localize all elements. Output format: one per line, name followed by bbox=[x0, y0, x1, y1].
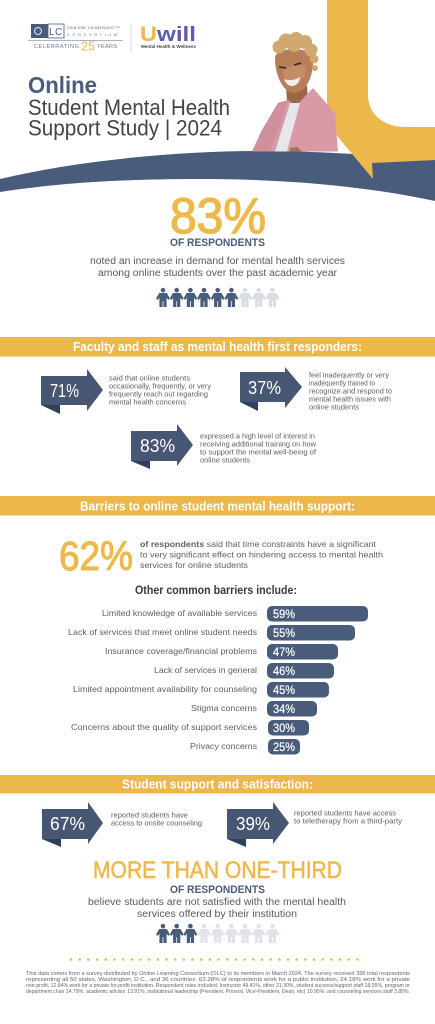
text: 67% description bbox=[111, 810, 202, 828]
text: 67% description: reported students have bbox=[111, 810, 188, 820]
bar: privacy 25%: 25% bbox=[273, 740, 295, 754]
arrow stat: 37% bbox=[240, 367, 302, 411]
white tee bbox=[275, 103, 300, 152]
title: Student Mental Health bbox=[28, 95, 230, 120]
bar: lack of services in general 46% bbox=[154, 663, 334, 678]
arrow stat: 39% bbox=[227, 802, 289, 847]
text: 71% description: said that online students bbox=[109, 374, 190, 382]
text: 37% description: feel inadequently or very bbox=[309, 370, 389, 380]
footnote bbox=[26, 971, 410, 995]
bar: lack of services 55%: Lack of services that meet online student needs bbox=[68, 627, 257, 637]
text: 83% description bbox=[200, 432, 317, 464]
text: 62% description bbox=[140, 540, 383, 570]
section band: barriers: Barriers to online student mental health support: bbox=[80, 498, 355, 514]
yellow speech-bubble U shape bbox=[327, 0, 435, 179]
text: 71% description: frequently reach out regarding bbox=[109, 390, 208, 398]
text: 37% description: inadequently trained to bbox=[309, 378, 375, 388]
bar: limited knowledge 59%: Limited knowledge of available services bbox=[102, 608, 257, 618]
arrow stat: 67% bbox=[42, 802, 103, 847]
logo: OLC celebrating 25 years: CONSORTIUM bbox=[67, 32, 117, 37]
logo: Uwill: U bbox=[140, 22, 157, 46]
section band: barriers bbox=[0, 496, 435, 516]
footnote: This data comes from a survey distributed by Online Learning Consortium (OLC) to its members in March 2024. The survey received 336 total respondents bbox=[26, 971, 410, 977]
stat: 83% of respondents: noted an increase in demand for mental health services bbox=[90, 256, 345, 267]
arrow stat: 71%: 71% bbox=[50, 381, 79, 401]
subheading: other barriers: Other common barriers include: bbox=[135, 585, 297, 597]
bar: quality concerns 30% bbox=[71, 720, 309, 736]
smile bbox=[284, 77, 300, 86]
bar: lack of services in general 46%: Lack of services in general bbox=[154, 665, 257, 675]
icon row: 6 of 9 people bbox=[156, 288, 279, 307]
bar: quality concerns 30%: Concerns about the quality of support services bbox=[71, 722, 257, 732]
bar: lack of services 55%: 55% bbox=[273, 626, 295, 640]
section band: faculty and staff bbox=[0, 337, 435, 356]
text: 71% description: occasionally, frequently, or very bbox=[109, 382, 211, 390]
logo: OLC celebrating 25 years: YEARS bbox=[97, 44, 117, 50]
footnote: department chair 14.79%, academic advisor 13.91%, institutional leadership (President, Provost, Vice-President, Dean, etc) 10.95%, and counseling services staff 3.85%. bbox=[26, 989, 410, 995]
bar: limited knowledge 59% bbox=[102, 606, 368, 622]
bar: insurance 47%: 47% bbox=[273, 645, 295, 659]
stat: more than one-third: believe students are not satisfied with the mental health bbox=[88, 897, 346, 908]
footnote: representing all 50 states, Washington, D.C., and 36 countries. 63.28% of respondents work for a public institution, 24.18% work for a private bbox=[26, 977, 410, 983]
logo: OLC celebrating 25 years bbox=[28, 24, 123, 54]
bar: stigma 34%: 34% bbox=[273, 702, 295, 716]
text: 39% description: to teletherapy from a third-party bbox=[294, 816, 402, 826]
text: 67% description: access to onsite counseling bbox=[111, 818, 202, 828]
eyes bbox=[279, 63, 301, 68]
text: 83% description: online students bbox=[200, 456, 250, 464]
dotted separator bbox=[71, 958, 366, 961]
text: 71% description: mental health concerns bbox=[109, 398, 186, 406]
logo divider bbox=[130, 24, 132, 52]
stat: more than one-third: MORE THAN ONE-THIRD bbox=[93, 857, 342, 884]
text: 37% description: online students bbox=[309, 402, 359, 412]
text: 83% description: receiving additional training on how bbox=[200, 440, 317, 448]
logo: OLC celebrating 25 years: ONLINE LEARNING™ bbox=[67, 25, 120, 30]
bar chart: common barriers bbox=[68, 606, 368, 754]
bar: insurance 47% bbox=[105, 644, 338, 660]
logo: Uwill bbox=[140, 22, 196, 49]
text: 62% description: of respondents said that time constraints have a significant bbox=[140, 540, 377, 549]
section band: student support: Student support and satisfaction: bbox=[122, 776, 313, 792]
logo: OLC celebrating 25 years: L bbox=[49, 27, 55, 38]
bar: limited knowledge 59%: 59% bbox=[273, 607, 295, 621]
text: 37% description: recognize and respond to bbox=[309, 386, 392, 396]
footnote: non-profit, 12.84% work for a private for-profit institution. Respondent roles included: Instructor 49.41%, other 21.30%, student success/support staff 18.05%, program or bbox=[26, 983, 410, 989]
stat: 83% of respondents bbox=[90, 188, 345, 279]
arrow stat: 39%: 39% bbox=[236, 814, 270, 834]
bar: stigma 34%: Stigma concerns bbox=[191, 703, 257, 713]
stat: 83% of respondents: among online students over the past academic year bbox=[98, 268, 338, 279]
arrow stat: 71% bbox=[41, 369, 103, 414]
crossed hand bbox=[290, 147, 302, 152]
bar: lack of services 55% bbox=[68, 625, 355, 640]
logo: OLC celebrating 25 years: 25 bbox=[81, 38, 95, 54]
face bbox=[275, 49, 313, 93]
bar: lack of services in general 46%: 46% bbox=[273, 664, 295, 678]
curly hair bbox=[272, 32, 318, 71]
arrow stat: 67%: 67% bbox=[50, 814, 85, 834]
text: 62% description: to very significant effect on hindering access to mental health bbox=[140, 550, 383, 560]
photo: smiling student bbox=[252, 32, 338, 152]
bar: appointment availability 45%: 45% bbox=[273, 683, 295, 697]
logo: OLC celebrating 25 years: C bbox=[55, 27, 62, 38]
text: 39% description: reported students have access bbox=[294, 808, 396, 818]
text: 71% description bbox=[109, 374, 211, 406]
arrow stat: 83%: 83% bbox=[140, 436, 175, 456]
logo: OLC celebrating 25 years: CELEBRATING bbox=[34, 44, 79, 50]
title: Support Study | 2024 bbox=[28, 116, 222, 140]
bar: stigma 34% bbox=[191, 701, 317, 716]
icon row: 3 of 9 people bbox=[156, 924, 279, 943]
stat: 83% of respondents: OF RESPONDENTS bbox=[170, 237, 265, 249]
arrow stat: 37%: 37% bbox=[248, 378, 281, 398]
bar: appointment availability 45%: Limited appointment availability for counseling bbox=[73, 684, 257, 694]
stat: more than one-third bbox=[88, 857, 346, 920]
bar: quality concerns 30%: 30% bbox=[273, 721, 295, 735]
logo: Uwill: will bbox=[156, 24, 196, 46]
bar: privacy 25%: Privacy concerns bbox=[190, 741, 257, 751]
text: 37% description bbox=[309, 370, 392, 412]
stat: more than one-third: OF RESPONDENTS bbox=[170, 884, 265, 896]
neck bbox=[286, 86, 308, 108]
bar: appointment availability 45% bbox=[73, 682, 329, 698]
text: 39% description bbox=[294, 808, 402, 826]
title bbox=[28, 72, 230, 140]
bar: privacy 25% bbox=[190, 739, 300, 754]
text: 37% description: mental health issues with bbox=[309, 394, 391, 404]
arrow stat: 83% bbox=[131, 424, 193, 469]
text: 62% description: services for online students bbox=[140, 561, 248, 570]
bar: insurance 47%: Insurance coverage/financial problems bbox=[105, 646, 257, 656]
section band: faculty and staff: Faculty and staff as mental health first responders: bbox=[73, 339, 362, 354]
title: Online bbox=[28, 72, 97, 98]
stat: 83% of respondents: 83% bbox=[170, 188, 266, 244]
pink shirt bbox=[252, 88, 338, 152]
text: 83% description: to support the mental well-being of bbox=[200, 448, 317, 456]
stat: more than one-third: services offered by their institution bbox=[137, 909, 297, 920]
section band: student support bbox=[0, 775, 435, 794]
header wave band bbox=[0, 151, 435, 201]
stat: 62%: 62% bbox=[59, 533, 133, 579]
text: 83% description: expressed a high level of interest in bbox=[200, 432, 315, 440]
logo: Uwill: Mental Health & Wellness bbox=[141, 44, 196, 49]
